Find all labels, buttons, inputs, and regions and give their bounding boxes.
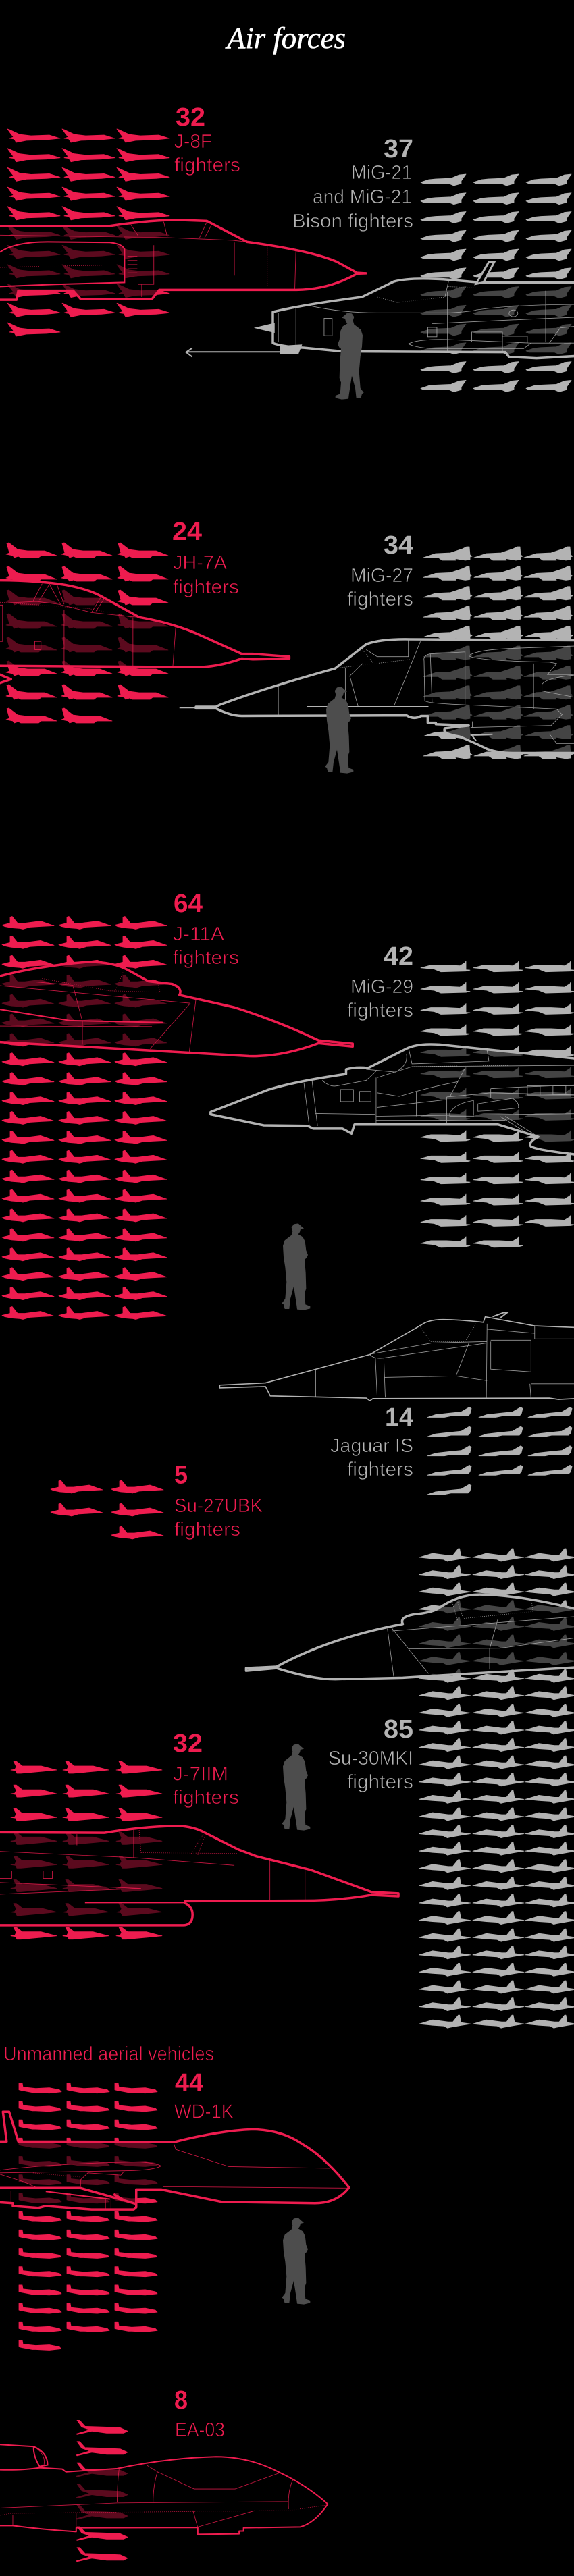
aircraft outline: J-7IIM bbox=[0, 1826, 398, 1925]
icon grid: 85 Su-30MKI fighters bbox=[419, 1549, 574, 2028]
label: 37 MiG-21 and MiG-21 Bison fighters: and MiG-21 bbox=[313, 186, 412, 208]
label: 8 EA-03: 8 bbox=[174, 2386, 188, 2415]
aircraft outline: JH-7A bbox=[0, 581, 289, 685]
icon grid: 37 MiG-21 fighters bbox=[421, 174, 571, 392]
icon grid: 8 EA-03 bbox=[76, 2420, 128, 2562]
label: 44 WD-1K: 44 bbox=[175, 2069, 203, 2097]
label: 44 WD-1K bbox=[174, 2069, 234, 2122]
label: 42 MiG-29 fighters bbox=[347, 942, 413, 1021]
label: 34 MiG-27 fighters: MiG-27 bbox=[350, 565, 413, 587]
title: Air forces bbox=[225, 22, 346, 55]
icon grid: 24 JH-7A fighters bbox=[6, 543, 168, 723]
label: 42 MiG-29 fighters: fighters bbox=[347, 1000, 413, 1021]
label: 32 J-7IIM fighters: 32 bbox=[173, 1729, 203, 1758]
icon grid: 42 MiG-29 fighters bbox=[421, 961, 574, 1247]
icon grid: 32 J-7IIM fighters bbox=[11, 1761, 162, 1939]
label: 5 Su-27UBK fighters: fighters bbox=[174, 1519, 240, 1540]
label: 64 J-11A fighters: J-11A bbox=[173, 923, 225, 945]
label: 32 J-7IIM fighters: fighters bbox=[173, 1787, 239, 1808]
label: 85 Su-30MKI fighters: Su-30MKI bbox=[328, 1748, 413, 1769]
icon: person scale 3 bbox=[282, 1223, 310, 1310]
label: 14 Jaguar IS fighters: Jaguar IS bbox=[330, 1435, 413, 1457]
icon grid: 34 MiG-27 fighters bbox=[423, 547, 573, 759]
label: 32 J-8F fighters: fighters bbox=[174, 155, 240, 176]
label: 37 MiG-21 and MiG-21 Bison fighters: 37 bbox=[384, 135, 413, 163]
aircraft outline: EA-03 bbox=[0, 2444, 328, 2534]
label: 8 EA-03: EA-03 bbox=[175, 2419, 225, 2441]
icon grid: 5 Su-27UBK fighters bbox=[51, 1480, 163, 1539]
aircraft outline: Su-30MKI bbox=[246, 1594, 574, 1680]
aircraft outline: MiG-29 bbox=[211, 1044, 574, 1156]
label: 37 MiG-21 and MiG-21 Bison fighters: Bison fighters bbox=[292, 211, 413, 232]
icon grid: 64 J-11A fighters bbox=[2, 917, 167, 1319]
aircraft outline: J-8F bbox=[0, 220, 366, 300]
label: 64 J-11A fighters: 64 bbox=[174, 890, 203, 918]
label: 42 MiG-29 fighters: MiG-29 bbox=[350, 976, 413, 998]
label: 5 Su-27UBK fighters: Su-27UBK bbox=[174, 1495, 263, 1517]
label: 34 MiG-27 fighters bbox=[347, 531, 413, 610]
aircraft outline: J-11A bbox=[0, 962, 353, 1056]
label: 85 Su-30MKI fighters bbox=[328, 1715, 413, 1793]
label: 8 EA-03 bbox=[174, 2386, 225, 2441]
label: 5 Su-27UBK fighters bbox=[174, 1461, 263, 1540]
label: 34 MiG-27 fighters: 34 bbox=[384, 531, 413, 560]
label: 32 J-8F fighters: 32 bbox=[176, 103, 205, 132]
icon: person scale 1 bbox=[336, 313, 364, 400]
aircraft outline: MiG-21 bbox=[186, 262, 574, 358]
label: 24 JH-7A fighters: fighters bbox=[173, 576, 239, 598]
label: 37 MiG-21 and MiG-21 Bison fighters bbox=[292, 135, 413, 232]
label: 34 MiG-27 fighters: fighters bbox=[347, 589, 413, 610]
heading: Unmanned aerial vehicles: Unmanned aerial vehicles bbox=[3, 2043, 214, 2065]
label: 14 Jaguar IS fighters bbox=[330, 1403, 413, 1480]
label: 14 Jaguar IS fighters: fighters bbox=[347, 1459, 413, 1480]
label: 5 Su-27UBK fighters: 5 bbox=[174, 1461, 188, 1489]
aircraft outline: MiG-27 bbox=[180, 639, 574, 753]
label: 32 J-7IIM fighters: J-7IIM bbox=[173, 1763, 228, 1785]
label: 24 JH-7A fighters bbox=[172, 518, 239, 598]
icon grid: 44 WD-1K bbox=[19, 2083, 157, 2351]
label: 32 J-7IIM fighters bbox=[173, 1729, 239, 1808]
label: 32 J-8F fighters bbox=[174, 103, 240, 176]
icon grid: 14 Jaguar IS fighters bbox=[427, 1407, 572, 1495]
icon: person scale 4 bbox=[282, 1744, 310, 1831]
label: 24 JH-7A fighters: JH-7A bbox=[173, 552, 228, 574]
label: 64 J-11A fighters: fighters bbox=[173, 947, 239, 969]
label: 24 JH-7A fighters: 24 bbox=[172, 518, 202, 546]
label: 42 MiG-29 fighters: 42 bbox=[384, 942, 413, 971]
label: 14 Jaguar IS fighters: 14 bbox=[385, 1403, 413, 1432]
icon grid: 32 J-8F fighters bbox=[7, 129, 169, 336]
icon: person scale 2 bbox=[325, 687, 353, 774]
icon: person scale 5 bbox=[282, 2218, 310, 2305]
label: 85 Su-30MKI fighters: 85 bbox=[384, 1715, 413, 1744]
label: 85 Su-30MKI fighters: fighters bbox=[347, 1771, 413, 1793]
aircraft outline: WD-1K bbox=[0, 2112, 349, 2209]
label: 64 J-11A fighters bbox=[173, 890, 239, 969]
aircraft outline: Jaguar IS bbox=[219, 1312, 574, 1401]
label: 44 WD-1K: WD-1K bbox=[174, 2101, 234, 2122]
label: 37 MiG-21 and MiG-21 Bison fighters: MiG-21 bbox=[351, 162, 412, 184]
label: 32 J-8F fighters: J-8F bbox=[174, 131, 212, 153]
